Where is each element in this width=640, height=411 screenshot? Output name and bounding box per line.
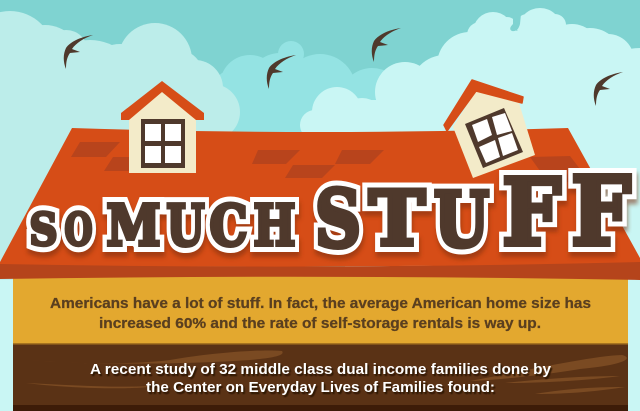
title shadow: H: [254, 198, 296, 264]
title shadow: [30, 162, 632, 272]
birds: [64, 28, 623, 106]
bird 4: [594, 72, 623, 106]
title outline: F: [502, 158, 561, 266]
title shadow: O: [66, 210, 94, 261]
title shadow: F: [572, 162, 632, 272]
title outline: O: [64, 205, 92, 256]
cloud notch: [510, 0, 521, 31]
title letters: [30, 156, 631, 268]
house wall: [13, 270, 628, 343]
title shadow: F: [503, 164, 562, 272]
roof shingle patches: [71, 142, 590, 182]
title letters: O: [64, 205, 92, 256]
study text shadow: the Center on Everyday Lives of Families found:: [148, 382, 496, 398]
title shadow: C: [210, 198, 248, 264]
title outline: [30, 156, 631, 268]
cloud: middle: [214, 41, 445, 150]
title outline: C: [210, 193, 248, 259]
bird 1: [64, 35, 93, 69]
study text lines: [90, 362, 551, 396]
title letters: S: [315, 172, 361, 266]
title letters: H: [254, 193, 296, 259]
title letters: C: [210, 193, 248, 259]
title outline: H: [254, 193, 296, 259]
title outline: S: [30, 205, 58, 256]
window: [141, 119, 185, 168]
title letters: M: [106, 193, 160, 259]
title letters: U: [166, 193, 204, 259]
title outline: S: [315, 172, 361, 266]
study text lines: A recent study of 32 middle class dual income families done by: [90, 362, 551, 378]
intro text: [50, 296, 591, 332]
bird 3: [372, 28, 401, 62]
title shadow: U: [168, 198, 206, 264]
cloud: left: [0, 11, 240, 150]
wood grain: [15, 350, 627, 394]
study text shadow: A recent study of 32 middle class dual income families done by: [92, 364, 552, 380]
brown panel: [13, 343, 628, 411]
study text shadow: [92, 364, 552, 398]
title outline: F: [571, 156, 631, 268]
title letters: F: [502, 158, 561, 266]
title shadow: M: [108, 198, 162, 264]
left lower sky: [0, 150, 80, 280]
title: so much stuff: [30, 156, 632, 272]
study text: [90, 362, 552, 398]
intro text: increased 60% and the rate of self-storage rentals is way up.: [99, 316, 541, 332]
bird 2: [267, 55, 296, 89]
right dormer, tilted: [444, 80, 535, 178]
title shadow: S: [30, 210, 58, 261]
title shadow: T: [370, 180, 426, 268]
title outline: T: [369, 174, 425, 262]
roof: [0, 128, 640, 280]
title shadow: U: [435, 181, 490, 269]
floor band: [13, 405, 628, 411]
intro text: Americans have a lot of stuff. In fact, the average American home size has: [50, 296, 591, 312]
title letters: F: [571, 156, 631, 268]
title letters: S: [30, 205, 58, 256]
title shadow: S: [316, 178, 362, 270]
title outline: U: [434, 176, 489, 264]
study text lines: the Center on Everyday Lives of Families found:: [146, 380, 495, 396]
window: [465, 108, 523, 168]
title letters: U: [434, 176, 489, 264]
left dormer: [121, 81, 204, 173]
title outline: U: [166, 193, 204, 259]
title outline: M: [106, 193, 160, 259]
title letters: T: [369, 174, 425, 262]
